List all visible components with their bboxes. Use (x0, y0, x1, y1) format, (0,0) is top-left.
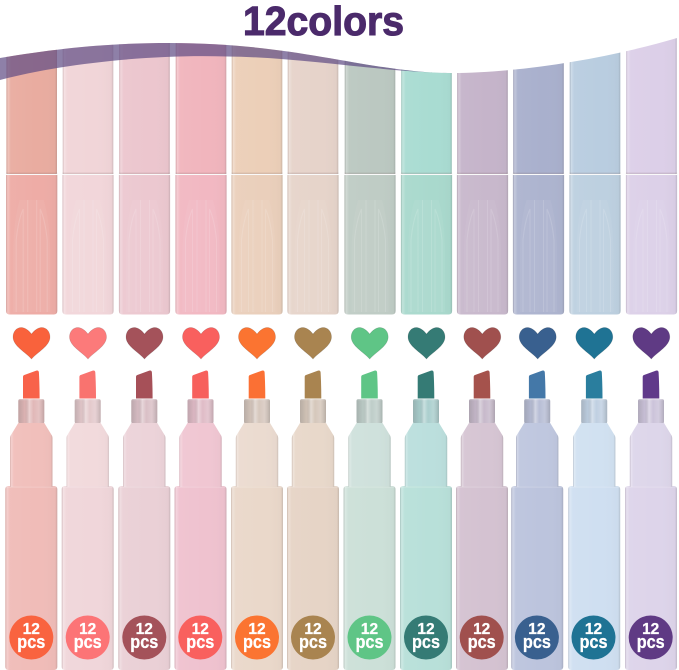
marker 6 (287, 370, 339, 670)
white header area (0, 0, 679, 73)
heart 7 (351, 328, 388, 359)
heart 12 (633, 328, 670, 359)
cap 2 blush (62, 20, 114, 314)
heart 9 (464, 328, 501, 359)
badge 5: pcs (243, 632, 271, 652)
badge 6: 12 (304, 621, 322, 638)
badge 7: 12 (361, 621, 378, 638)
marker 3 (118, 370, 170, 670)
badge 2 (66, 616, 110, 660)
hearts row (13, 328, 670, 359)
cap 10 periwinkle (513, 20, 564, 314)
badge 8: 12 (417, 621, 435, 638)
cap 11 sky (569, 20, 621, 314)
cap 12 lilac (626, 20, 677, 314)
badge 12 (629, 616, 673, 660)
badge 4 (178, 616, 222, 660)
cap 3 rose (119, 20, 170, 314)
badge 7: pcs (356, 632, 384, 652)
badge 3: 12 (136, 621, 153, 638)
cap 1 coral (6, 20, 57, 314)
badge 11: pcs (580, 632, 608, 652)
cap 4 pink (175, 20, 227, 314)
badge 7 (348, 616, 392, 660)
heart 8 (408, 328, 445, 359)
badge 2: pcs (74, 632, 102, 652)
badge 1: pcs (17, 632, 45, 652)
badge 8: pcs (412, 632, 440, 652)
marker 1 (5, 370, 57, 670)
marker caps row (6, 20, 677, 314)
cap 7 sage (344, 20, 396, 314)
badge 3 (122, 616, 166, 660)
heart 10 (519, 328, 556, 359)
badge 4: 12 (192, 621, 209, 638)
heart 3 (126, 328, 163, 359)
badge 12: pcs (637, 632, 665, 652)
marker 10 (511, 370, 563, 670)
marker 9 (456, 370, 508, 670)
badge 11 (572, 616, 616, 660)
cap 5 peach (231, 20, 283, 314)
marker 5 (231, 370, 283, 670)
marker 7 (344, 370, 396, 670)
heart 11 (576, 328, 613, 359)
badge 9: 12 (473, 621, 490, 638)
badge 4: pcs (186, 632, 214, 652)
badge 1: 12 (23, 621, 40, 638)
badge 10: 12 (528, 621, 546, 638)
badge 9 (460, 616, 504, 660)
heart 1 (13, 328, 50, 359)
cap 9 mauve (457, 20, 508, 314)
badge 8 (404, 616, 448, 660)
purple wave band (0, 43, 451, 80)
heart 2 (70, 328, 106, 359)
badge 6: pcs (299, 632, 327, 652)
cap 6 beige (287, 20, 339, 314)
marker 4 (174, 370, 226, 670)
badge 9: pcs (468, 632, 496, 652)
badge 6 (291, 616, 335, 660)
marker 12 (625, 370, 677, 670)
open markers row (5, 370, 677, 670)
badge 2: 12 (79, 621, 96, 638)
badge 5 (235, 616, 279, 660)
marker 8 (400, 370, 452, 670)
badge 1 (9, 616, 53, 660)
pack count badges (9, 616, 673, 660)
heart 5 (238, 328, 276, 359)
badge 5: 12 (248, 621, 266, 638)
cap 8 mint (401, 20, 452, 314)
badge 12: 12 (642, 621, 659, 638)
badge 10 (515, 616, 559, 660)
marker 2 (62, 370, 114, 670)
badge 11: 12 (585, 621, 602, 638)
badge 3: pcs (130, 632, 158, 652)
marker 11 (568, 370, 620, 670)
heart 6 (294, 328, 332, 359)
badge 10: pcs (523, 632, 551, 652)
heart 4 (182, 328, 220, 359)
